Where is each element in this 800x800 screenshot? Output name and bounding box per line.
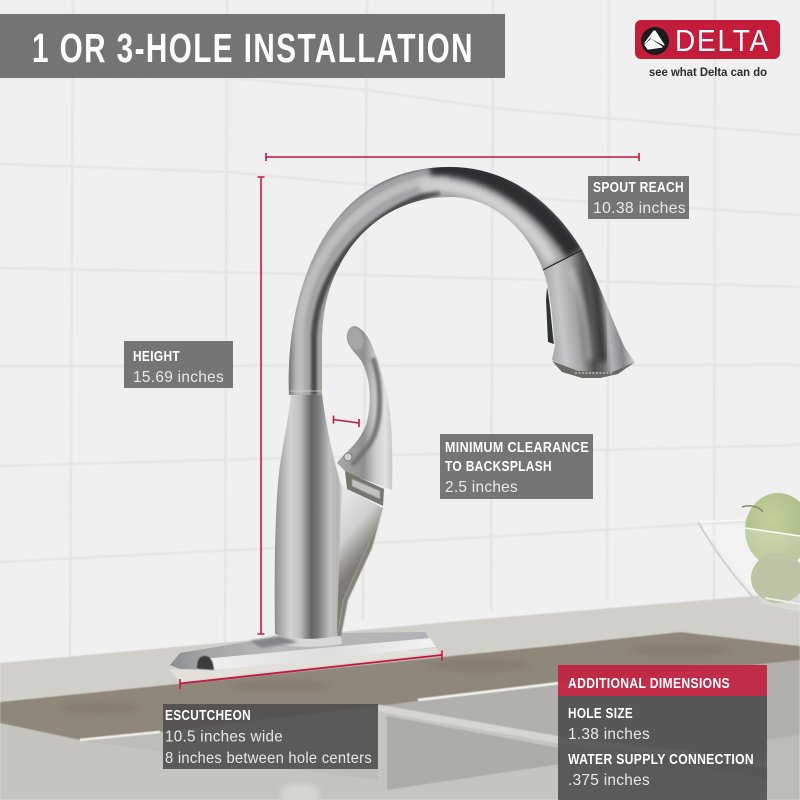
callout: minimum clearance: 2.5 inches <box>445 479 518 496</box>
callout: spout reach: 10.38 inches <box>593 200 686 217</box>
panel body: .375 inches <box>568 772 650 789</box>
callout: height <box>124 341 233 388</box>
callout: minimum clearance: MINIMUM CLEARANCE <box>445 440 589 456</box>
icon: delta mark <box>641 27 669 55</box>
logo: Delta <box>635 20 780 79</box>
callout: escutcheon <box>163 704 378 769</box>
spout arc <box>289 165 582 395</box>
neck seam <box>290 390 322 392</box>
faucet body <box>275 393 342 639</box>
dimension line: spout reach <box>266 153 639 161</box>
callout: minimum clearance: TO BACKSPLASH <box>445 459 552 475</box>
spray head <box>543 250 635 378</box>
faucet base plate <box>170 632 436 670</box>
title banner <box>0 14 505 78</box>
faucet <box>170 165 635 670</box>
dimension line: minimum clearance <box>334 416 359 427</box>
logo: Delta: see what Delta can do <box>649 67 767 79</box>
dimension line: height <box>258 177 264 634</box>
dimension line: escutcheon <box>180 650 442 689</box>
panel body: 1.38 inches <box>568 726 650 743</box>
panel heading <box>558 665 767 696</box>
logo: Delta: DELTA <box>675 23 770 58</box>
lower counter surface <box>0 706 800 800</box>
lever handle <box>337 326 392 506</box>
panel heading: ADDITIONAL DIMENSIONS <box>568 676 730 692</box>
countertop <box>0 592 800 800</box>
panel body <box>558 696 767 800</box>
panel: additional dimensions <box>558 665 767 800</box>
callout: escutcheon: 8 inches between hole centers <box>165 750 372 767</box>
title banner: 1 OR 3-HOLE INSTALLATION <box>32 25 474 71</box>
callout: minimum clearance <box>440 434 593 499</box>
panel body: HOLE SIZE <box>568 706 633 722</box>
faucet wing behind body <box>320 470 383 636</box>
glass bowl with apples <box>698 493 800 614</box>
callout: escutcheon: 10.5 inches wide <box>165 728 283 746</box>
callout: spout reach <box>588 176 689 219</box>
callout: height: HEIGHT <box>133 349 180 365</box>
panel body: WATER SUPPLY CONNECTION <box>568 752 754 768</box>
callout: height: 15.69 inches <box>133 369 224 386</box>
callout: escutcheon: ESCUTCHEON <box>165 708 251 724</box>
callout: spout reach: SPOUT REACH <box>593 180 684 196</box>
